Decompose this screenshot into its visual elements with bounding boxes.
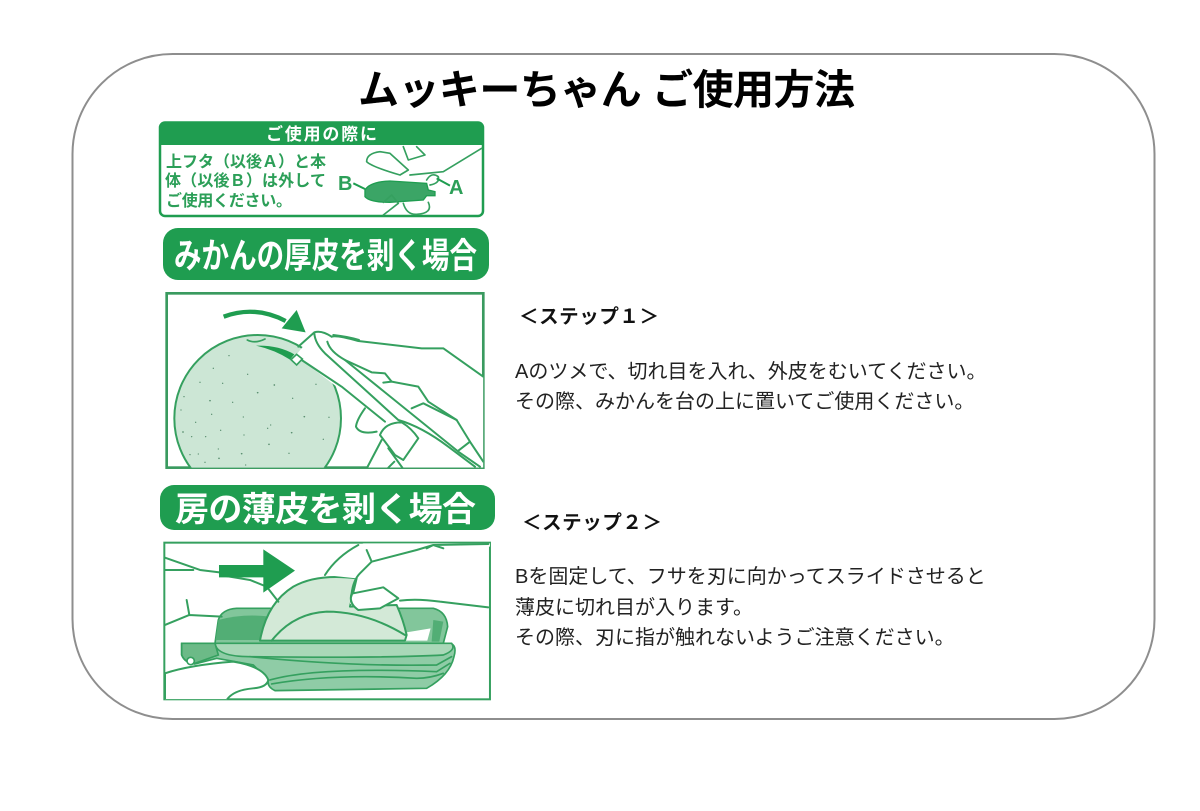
notice header [160, 122, 483, 145]
notice text: 体（以後Ｂ）は外して [165, 171, 326, 190]
notice header: ご使用の際に [266, 124, 377, 144]
illustration: peeling outer skin [165, 292, 485, 469]
illustration: separated lid A and body B [353, 147, 482, 215]
panel: before use notice [160, 122, 483, 216]
step 1 instructions [515, 360, 987, 413]
illustration: sliding segment across blade [164, 543, 490, 700]
straight arrow [219, 549, 295, 593]
orange with dots [173, 334, 342, 468]
step 2 instructions: その際、刃に指が触れないようご注意ください。 [515, 626, 955, 649]
title: ムッキーちゃん ご使用方法 [358, 67, 855, 113]
step 1 instructions: Aのツメで、切れ目を入れ、外皮をむいてください。 [515, 360, 987, 383]
rounded outer frame [72, 54, 1154, 719]
label A: A [449, 177, 463, 199]
hands [165, 543, 490, 700]
step 2 instructions: 薄皮に切れ目が入ります。 [515, 596, 753, 619]
step 2 heading: ＜ステップ２＞ [522, 512, 662, 534]
heading banner: thin peel: 房の薄皮を剥く場合 [175, 491, 476, 529]
heading banner: thick peel [163, 228, 489, 280]
body B back [215, 608, 448, 643]
notice text [165, 152, 326, 210]
step 1 instructions: その際、みかんを台の上に置いてご使用ください。 [515, 390, 974, 413]
step 2 instructions: Bを固定して、フサを刃に向かってスライドさせると [515, 565, 986, 588]
peel cut marks [247, 339, 294, 360]
step 1 heading: ＜ステップ１＞ [519, 306, 659, 328]
label B: B [338, 173, 352, 195]
orange segment [260, 577, 407, 641]
hand and tool A [291, 332, 483, 468]
step 2 instructions [515, 565, 986, 649]
notice text: ご使用ください。 [166, 191, 292, 210]
heading banner: thick peel: みかんの厚皮を剥く場合 [174, 237, 477, 276]
body B front [182, 643, 455, 691]
notice text: 上フタ（以後Ａ）と本 [166, 152, 326, 171]
curved arrow [224, 310, 306, 332]
